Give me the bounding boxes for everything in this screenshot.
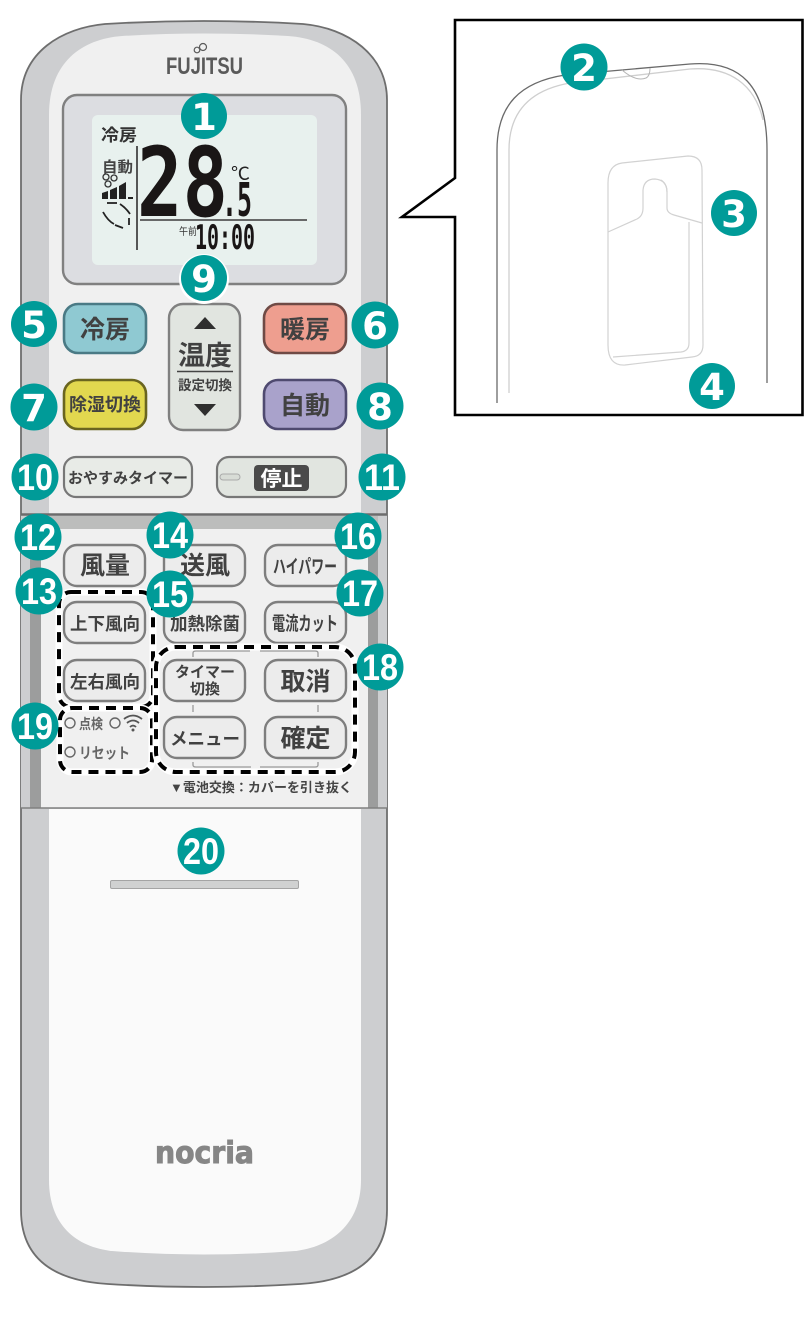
number badge 13: 13: [21, 571, 57, 612]
LCD mode: cooling: 冷房: [101, 126, 137, 145]
brand: FUJITSU: FUJITSU: [166, 53, 243, 80]
button: cancel: 取消: [280, 668, 331, 696]
number badge 1: 1: [191, 96, 217, 139]
button: timer switch: [164, 660, 245, 701]
button: sleep timer: おやすみタイマー: [68, 470, 188, 487]
button: stop: [217, 457, 346, 497]
button: timer switch: タイマー: [175, 664, 235, 681]
button: confirm: [265, 717, 346, 758]
button: cooling: 冷房: [80, 316, 130, 344]
number badge 9: 9: [191, 258, 217, 301]
button: heat sterilization: 加熱除菌: [170, 614, 240, 634]
number badge 19: 19: [17, 706, 53, 747]
LCD clock: 10:00: [195, 218, 255, 258]
brand: nocria: nocria: [155, 1136, 254, 1171]
number badge 5: [11, 301, 57, 347]
number badge 7: 7: [21, 387, 47, 430]
button: heating: 暖房: [280, 316, 330, 344]
button: temperature: 設定切換: [178, 377, 232, 393]
button: menu: メニュー: [170, 729, 240, 749]
button: dehumidify: 除湿切換: [69, 395, 141, 415]
number badge 10: 10: [17, 457, 53, 498]
button: current cut: [265, 602, 346, 643]
LCD display: [63, 95, 346, 284]
number badge 14: 14: [152, 515, 188, 556]
button: horizontal louver: 左右風向: [70, 672, 140, 692]
LCD fan icon: [103, 174, 117, 187]
battery cover: [49, 809, 361, 1254]
middle section panel: [21, 514, 387, 808]
button: auto: [264, 380, 346, 429]
LCD louver arcs: [103, 203, 130, 228]
LCD fan level bars: [102, 182, 133, 199]
number badge 4: 4: [699, 366, 725, 409]
number badge 4: [689, 363, 735, 409]
button: sleep timer: [64, 457, 192, 497]
number badge 2: 2: [571, 47, 597, 90]
button: heat sterilization: [164, 602, 245, 643]
button: cancel: [265, 660, 346, 701]
number badge 6: 6: [362, 305, 388, 348]
button: temperature: 温度: [178, 341, 232, 371]
number badge 20: 20: [183, 831, 219, 872]
button: heating: [264, 304, 346, 353]
number badge 5: 5: [21, 304, 47, 347]
number badge 2: [560, 44, 608, 90]
LCD temperature: .5: [222, 173, 252, 227]
number badge 3: 3: [721, 193, 747, 236]
LCD degree sign: ℃: [231, 164, 250, 184]
number badge 3: [711, 190, 757, 236]
hanger bracket: [608, 156, 703, 365]
button: temperature: [169, 304, 240, 430]
number badge 17: 17: [342, 573, 378, 614]
button: fan speed: 風量: [80, 552, 130, 580]
LCD timer label: 午前: [179, 225, 197, 238]
group: louver buttons: [59, 592, 153, 707]
group: indicators: [60, 708, 152, 772]
button: cooling: [64, 304, 146, 353]
number badge 8: 8: [367, 386, 393, 429]
bracket lines: [193, 651, 318, 767]
number badge 9: [179, 254, 229, 304]
LCD fan mode: auto: 自動: [102, 158, 133, 176]
number badge 6: [352, 302, 398, 348]
number badge 16: 16: [340, 516, 376, 557]
upper face panel: [49, 34, 361, 517]
button: fan mode: 送風: [180, 552, 230, 580]
brand: FUJITSU: [166, 44, 243, 80]
button: stop: 停止: [260, 468, 302, 491]
remote control body: [21, 21, 387, 1287]
button: fan speed: [64, 545, 145, 586]
button: current cut: 電流カット: [272, 613, 338, 635]
rear outline: [497, 64, 767, 403]
indicator: check: 点検: [79, 716, 103, 732]
battery note: ▼電池交換：カバーを引き抜く: [170, 780, 352, 795]
number badge 15: 15: [152, 574, 188, 615]
number badge 8: [356, 382, 404, 430]
indicator: wifi: [110, 716, 142, 732]
button: dehumidify: [64, 380, 146, 429]
number badge 7: [10, 384, 58, 430]
button: high power: ハイパワー: [273, 556, 337, 578]
indicator: reset: リセット: [79, 745, 130, 762]
number badge 12: 12: [20, 517, 56, 558]
inset callout: back of remote: [402, 20, 802, 415]
button: timer switch: 切換: [190, 680, 220, 698]
button: vertical louver: 上下風向: [70, 614, 140, 634]
number badge 11: 11: [364, 457, 400, 498]
button: auto: 自動: [280, 392, 330, 420]
cover slit: [110, 880, 298, 888]
LCD temperature: 28: [137, 127, 228, 239]
button: high power: [265, 545, 346, 586]
button: menu: [164, 717, 245, 758]
number badge 18: 18: [362, 647, 398, 688]
button: confirm: 確定: [280, 725, 331, 753]
button: fan mode: [164, 545, 245, 586]
number badge 1: [181, 93, 227, 139]
group: timer and menu buttons: [156, 647, 355, 772]
